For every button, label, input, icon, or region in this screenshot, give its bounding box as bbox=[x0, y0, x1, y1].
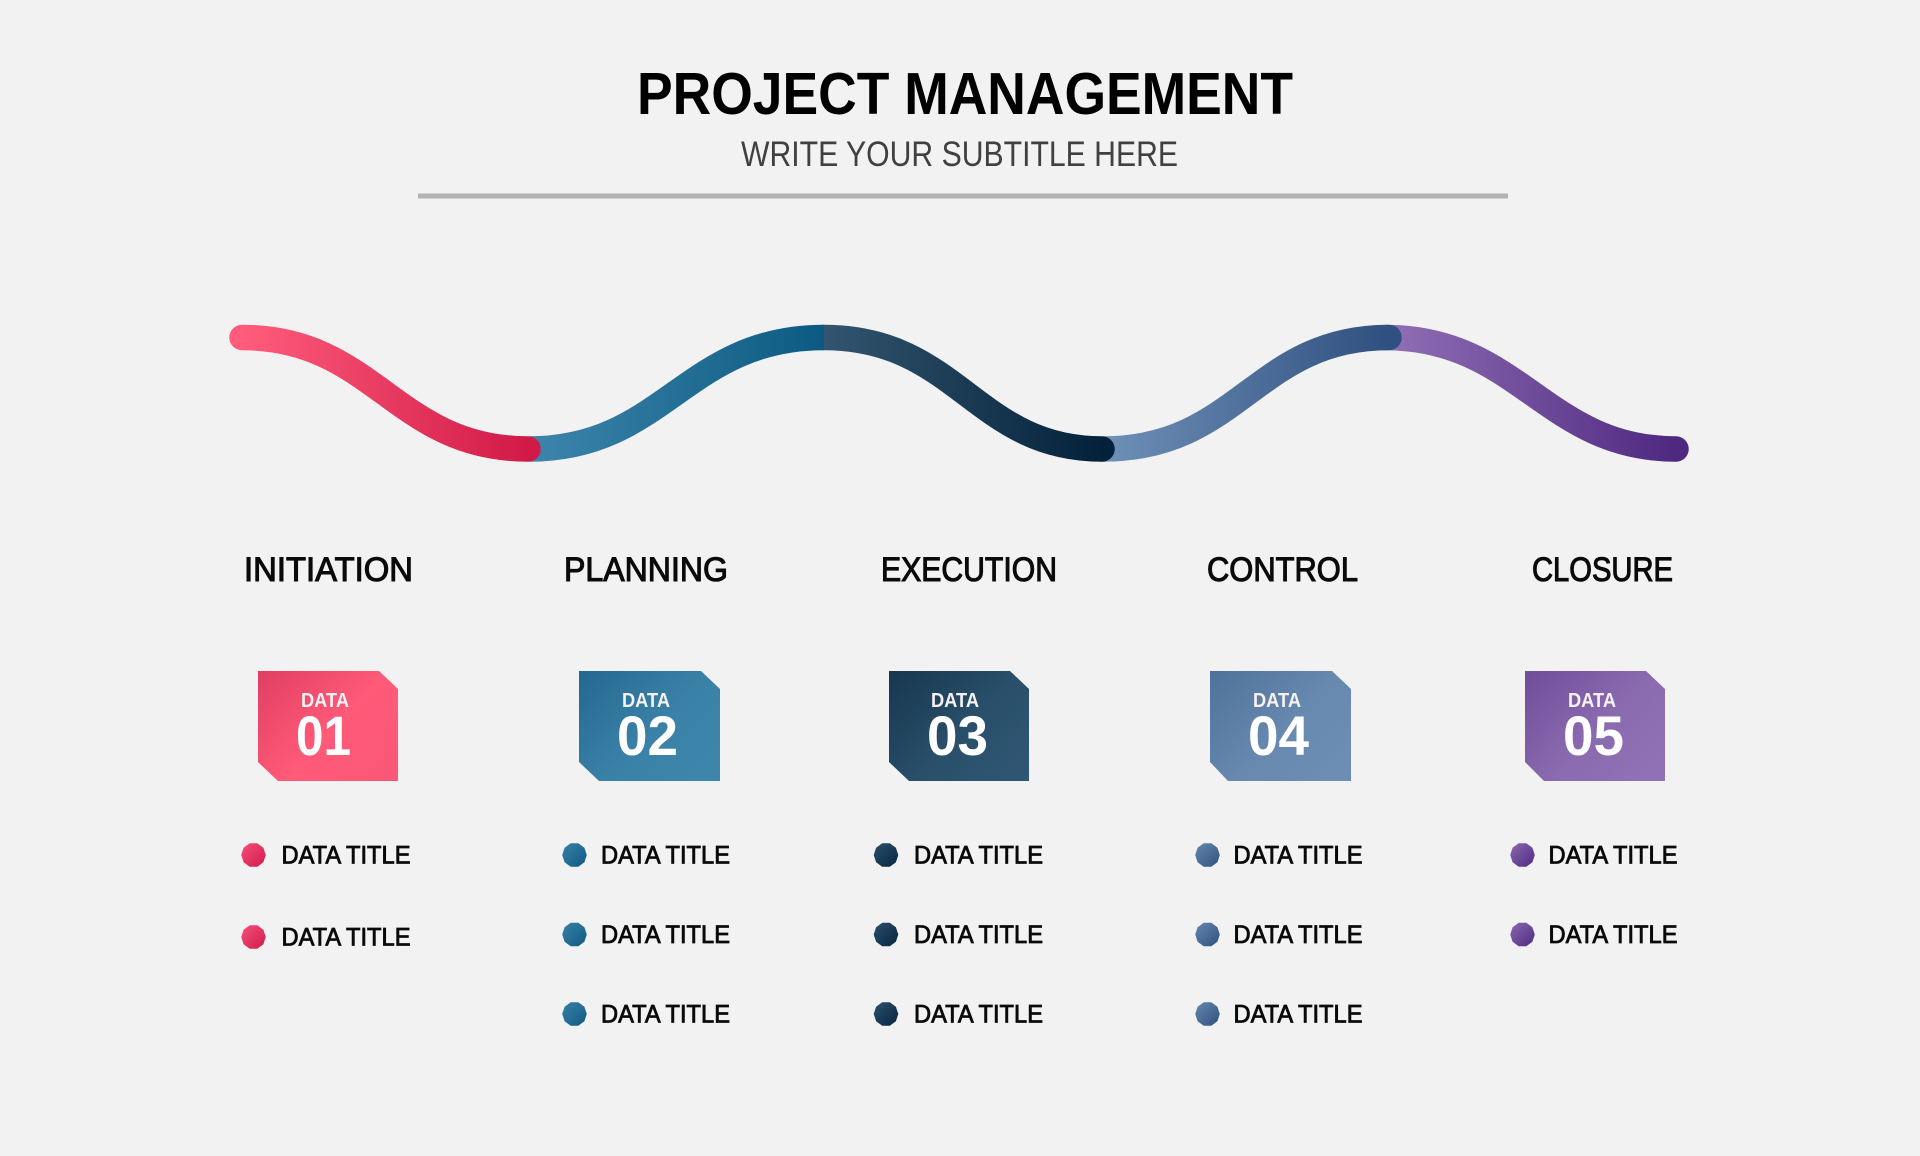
badge 05: DATA bbox=[1568, 690, 1616, 712]
bullet item: DATA TITLE bbox=[282, 924, 410, 952]
phase heading: planning: PLANNING bbox=[564, 551, 728, 589]
badge 03: 03 bbox=[927, 704, 988, 767]
badge 05: 05 bbox=[1563, 704, 1624, 767]
wave timeline bbox=[242, 338, 1676, 449]
badge 03 bbox=[889, 671, 1029, 781]
phase heading: control: CONTROL bbox=[1207, 551, 1358, 589]
bullet item: DATA TITLE bbox=[1234, 842, 1362, 870]
bullet item: DATA TITLE bbox=[914, 1000, 1043, 1028]
bullet item: DATA TITLE bbox=[914, 921, 1043, 949]
wave segment 4: control bbox=[1103, 338, 1389, 449]
bullet list: planning bbox=[562, 842, 730, 1028]
subtitle: WRITE YOUR SUBTITLE HERE bbox=[741, 135, 1178, 174]
bullet item: DATA TITLE bbox=[601, 1000, 730, 1028]
badge 02 bbox=[579, 671, 720, 781]
badge 01: DATA bbox=[301, 690, 349, 712]
bullet list: execution bbox=[874, 842, 1043, 1028]
badge 04: DATA bbox=[1253, 690, 1301, 712]
bullet item: DATA TITLE bbox=[914, 842, 1043, 870]
phase heading: execution: EXECUTION bbox=[881, 551, 1057, 589]
bullet item: DATA TITLE bbox=[1548, 842, 1678, 870]
wave segment 5: closure bbox=[1385, 338, 1676, 449]
badge 01 bbox=[258, 671, 398, 781]
phase heading: closure: CLOSURE bbox=[1532, 551, 1673, 589]
bullet item: DATA TITLE bbox=[1234, 921, 1362, 949]
phase heading: initiation: INITIATION bbox=[244, 551, 413, 589]
bullet list: closure bbox=[1510, 842, 1678, 949]
bullet item: DATA TITLE bbox=[282, 842, 410, 870]
bullet item: DATA TITLE bbox=[601, 842, 730, 870]
wave segment 2: planning bbox=[529, 338, 824, 449]
badge 04 bbox=[1210, 671, 1351, 781]
badge 02: DATA bbox=[622, 690, 670, 712]
badge 03: DATA bbox=[931, 690, 979, 712]
title: PROJECT MANAGEMENT bbox=[637, 61, 1293, 127]
badge 02: 02 bbox=[617, 704, 678, 767]
badge 05 bbox=[1525, 671, 1665, 781]
bullet item: DATA TITLE bbox=[601, 921, 730, 949]
bullet list: initiation bbox=[241, 842, 410, 952]
wave segment 1: initiation bbox=[242, 338, 528, 449]
bullet item: DATA TITLE bbox=[1548, 921, 1678, 949]
bullet list: control bbox=[1195, 842, 1362, 1028]
badge 01: 01 bbox=[296, 704, 351, 767]
bullet item: DATA TITLE bbox=[1234, 1000, 1362, 1028]
wave segment 3: execution bbox=[824, 338, 1102, 449]
badge 04: 04 bbox=[1248, 704, 1309, 767]
